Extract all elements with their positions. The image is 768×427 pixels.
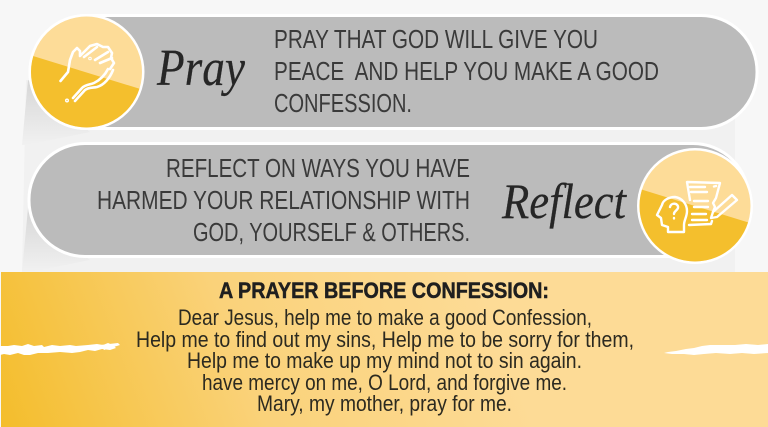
brush stroke: right [664,344,768,355]
icon: head and notes [637,148,750,264]
heading: pray: Pray [156,40,246,97]
text: reflect body: GOD, YOURSELF & OTHERS. [193,219,470,247]
text: reflect body: HARMED YOUR RELATIONSHIP WITH [97,187,470,215]
text: prayer body: Mary, my mother, pray for me. [257,391,512,416]
icon: praying hands [31,16,144,128]
panel: reflect [29,144,760,270]
text: prayer body: Help me to find out my sins, Help me to be sorry for them, [136,327,634,352]
text: prayer body: Help me to make up my mind not to sin again. [187,348,582,373]
heading: reflect: Reflect [501,173,627,229]
text: pray body: PEACE AND HELP YOU MAKE A GOOD [274,58,659,86]
text: reflect body: REFLECT ON WAYS YOU HAVE [166,155,470,183]
text: pray body: PRAY THAT GOD WILL GIVE YOU [274,26,598,54]
pill: reflect background [29,144,749,256]
panel: pray [20,14,757,135]
prayer background [1,272,768,427]
text: prayer body: Dear Jesus, help me to make a good Confession, [178,305,592,330]
brush stroke: left [0,343,120,355]
text: prayer body: have mercy on me, O Lord, and forgive me. [202,370,567,395]
pill: pray background [30,16,757,128]
panel: prayer [0,272,768,427]
heading: prayer: A PRAYER BEFORE CONFESSION: [219,278,549,303]
text: pray body: CONFESSION. [274,90,412,118]
